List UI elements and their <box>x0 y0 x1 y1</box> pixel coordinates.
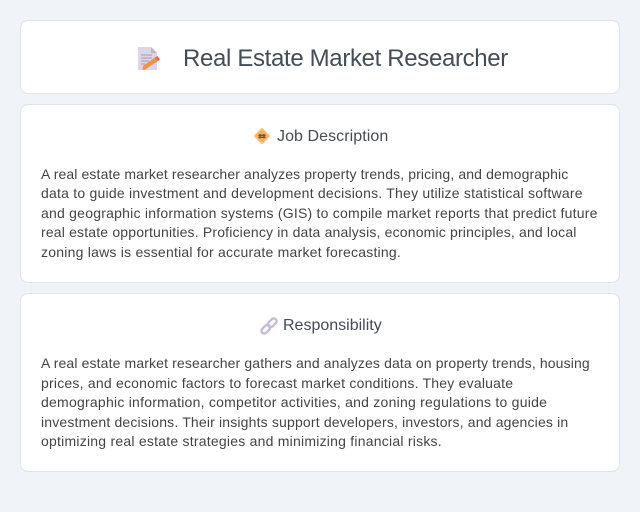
job description text: and geographic information systems (GIS) to compile market reports that predict future <box>41 205 598 221</box>
responsibility text: A real estate market researcher gathers and analyzes data on property trends, housing <box>41 355 590 371</box>
icon: chain link <box>260 317 278 335</box>
title text: Real Estate Market Researcher <box>183 45 508 72</box>
job description text: A real estate market researcher analyzes property trends, pricing, and demographic <box>41 166 568 182</box>
panel: title <box>20 20 620 94</box>
icon: document with pencil <box>138 47 160 70</box>
heading: job description: Job Description <box>277 128 388 145</box>
responsibility text: demographic information, competitor activities, and zoning regulations to guide <box>41 394 547 410</box>
responsibility text: prices, and economic factors to forecast market conditions. They evaluate <box>41 375 513 391</box>
panel: job description <box>20 104 620 283</box>
icon: orange diamond <box>254 128 270 144</box>
panel: responsibility <box>20 293 620 472</box>
responsibility text <box>41 355 590 449</box>
job description text: zoning laws is essential for accurate market forecasting. <box>41 244 401 260</box>
responsibility text: optimizing real estate strategies and minimizing financial risks. <box>41 433 442 449</box>
job description text: data to guide investment and development decisions. They utilize statistical software <box>41 185 583 201</box>
job description text: real estate opportunities. Proficiency in data analysis, economic principles, and local <box>41 224 577 240</box>
responsibility text: investment decisions. Their insights support developers, investors, and agencies in <box>41 414 568 430</box>
job description text <box>41 166 598 260</box>
heading: responsibility: Responsibility <box>283 317 382 334</box>
